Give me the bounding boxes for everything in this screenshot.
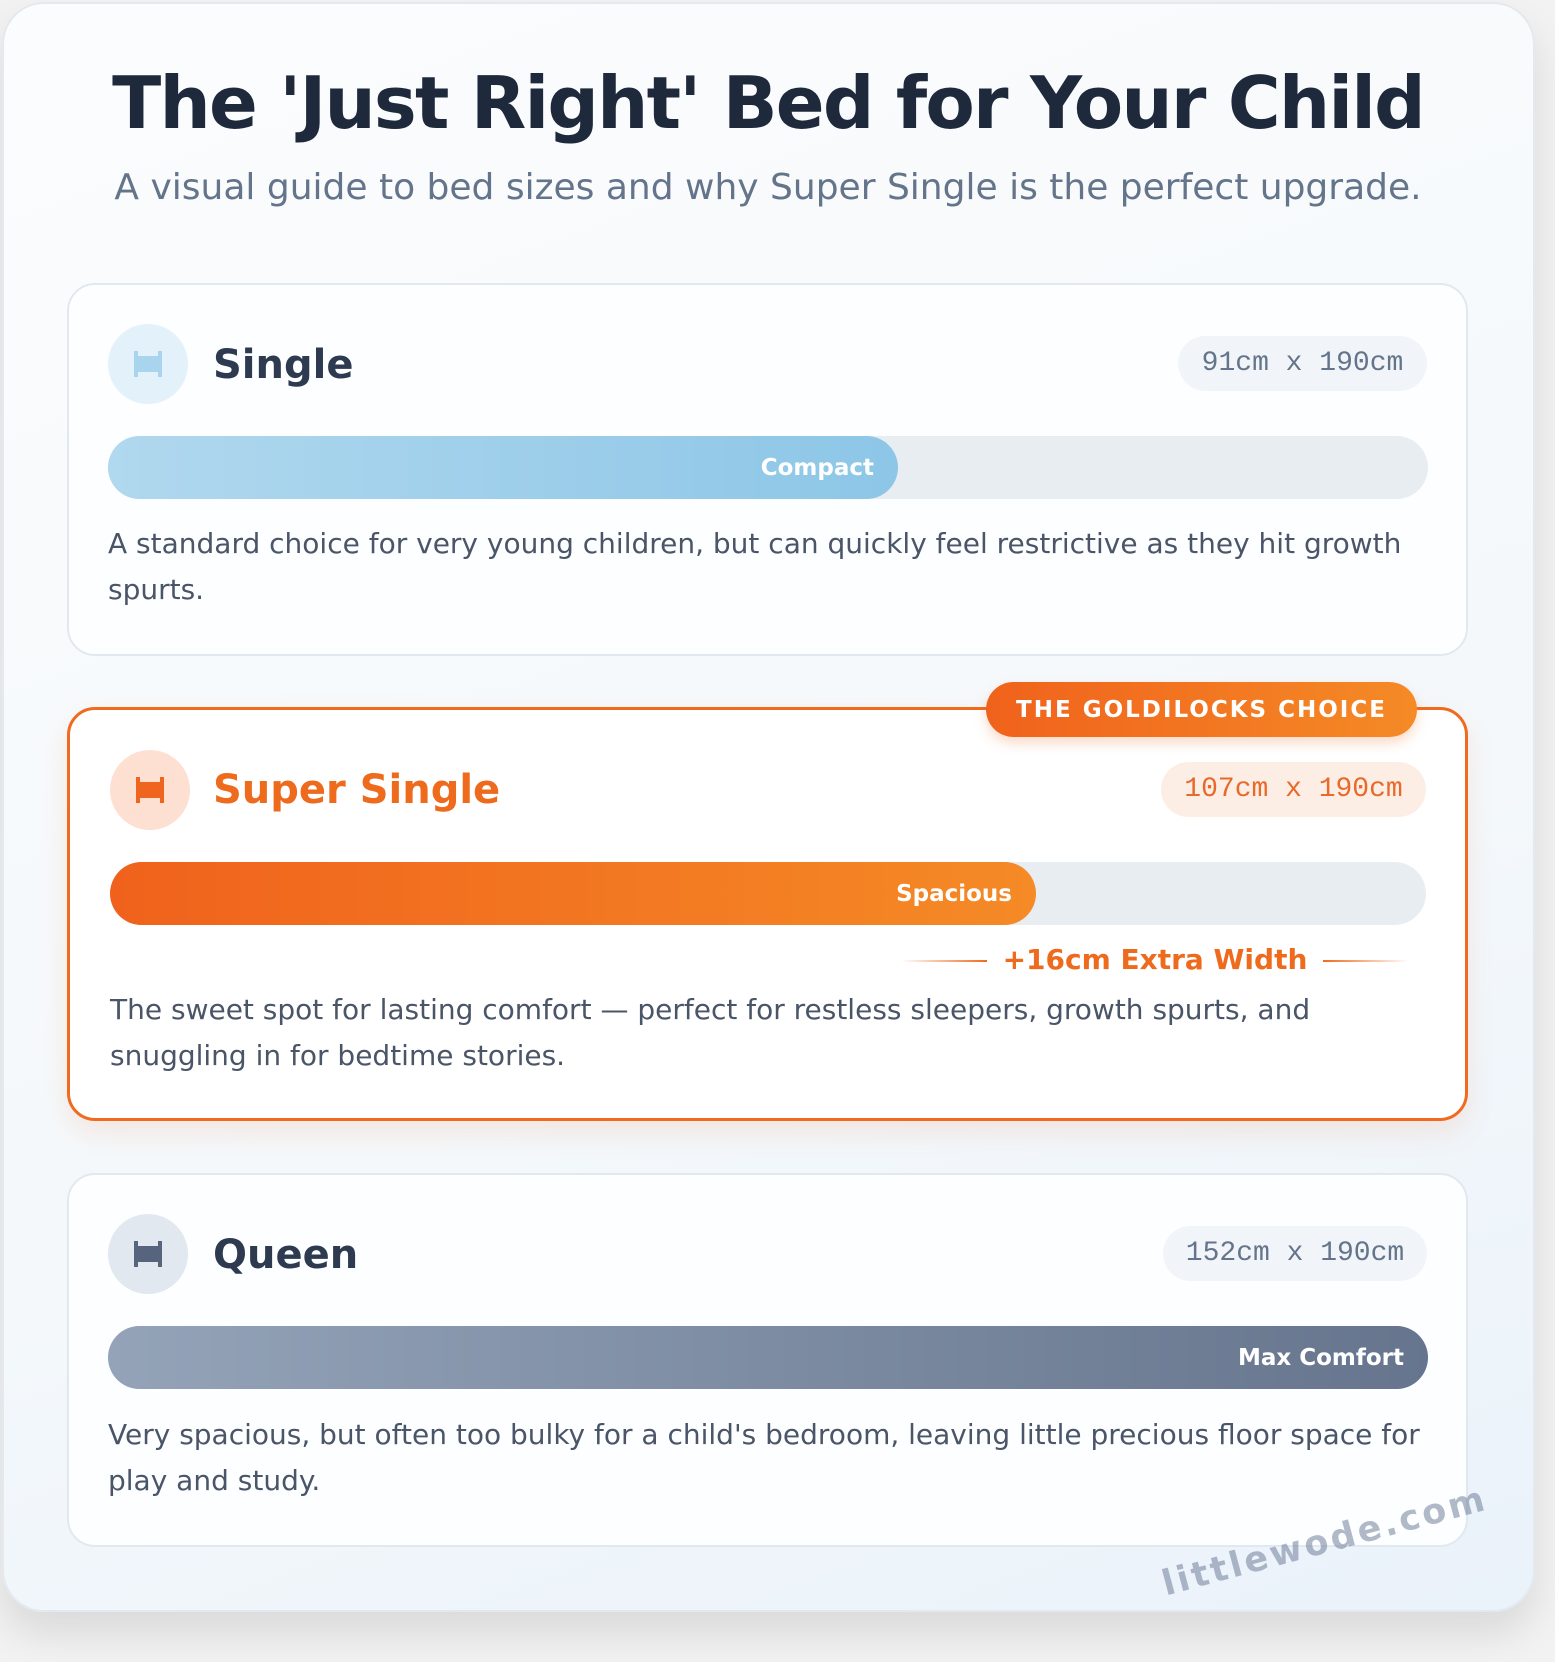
size pill — [1163, 1226, 1427, 1281]
title: The 'Just Right' Bed for Your Child — [112, 61, 1424, 145]
watermark: littlewode.com — [1158, 1479, 1492, 1604]
callout: extra width: +16cm Extra Width — [1003, 943, 1307, 976]
description: queen: Very spacious, but often too bulky for a child's bedroom, leaving little precious floor space for play and study. — [108, 1418, 1420, 1497]
size pill: 91cm x 190cm — [1202, 348, 1403, 379]
icon: single bed — [108, 324, 188, 404]
description: single: A standard choice for very young children, but can quickly feel restrictive as they hit growth spurts. — [108, 527, 1401, 606]
bar: queen: Max Comfort — [1238, 1344, 1404, 1370]
icon: super single bed — [110, 750, 190, 830]
description: super single: The sweet spot for lasting comfort — perfect for restless sleepers, growth spurts, and snuggling in for bedtime stories. — [110, 993, 1310, 1072]
bar: single — [108, 436, 1428, 499]
heading: super single: Super Single — [213, 767, 500, 813]
size pill — [1178, 336, 1427, 391]
size pill: 152cm x 190cm — [1186, 1238, 1404, 1269]
badge: goldilocks choice: THE GOLDILOCKS CHOICE — [1016, 696, 1387, 722]
bar: single: Compact — [761, 454, 874, 480]
size pill: 107cm x 190cm — [1184, 774, 1403, 805]
icon: queen bed — [108, 1214, 188, 1294]
size pill — [1161, 762, 1426, 817]
bar: queen — [108, 1326, 1428, 1389]
panel: single — [67, 283, 1468, 656]
panel: super single — [67, 707, 1468, 1121]
bar: super single: Spacious — [896, 880, 1012, 906]
bar: super single — [110, 862, 1426, 925]
badge: goldilocks choice — [986, 682, 1417, 737]
heading: queen: Queen — [213, 1232, 358, 1278]
subtitle: A visual guide to bed sizes and why Super Single is the perfect upgrade. — [114, 167, 1422, 208]
heading: single: Single — [213, 342, 353, 388]
panel: queen — [67, 1173, 1468, 1547]
